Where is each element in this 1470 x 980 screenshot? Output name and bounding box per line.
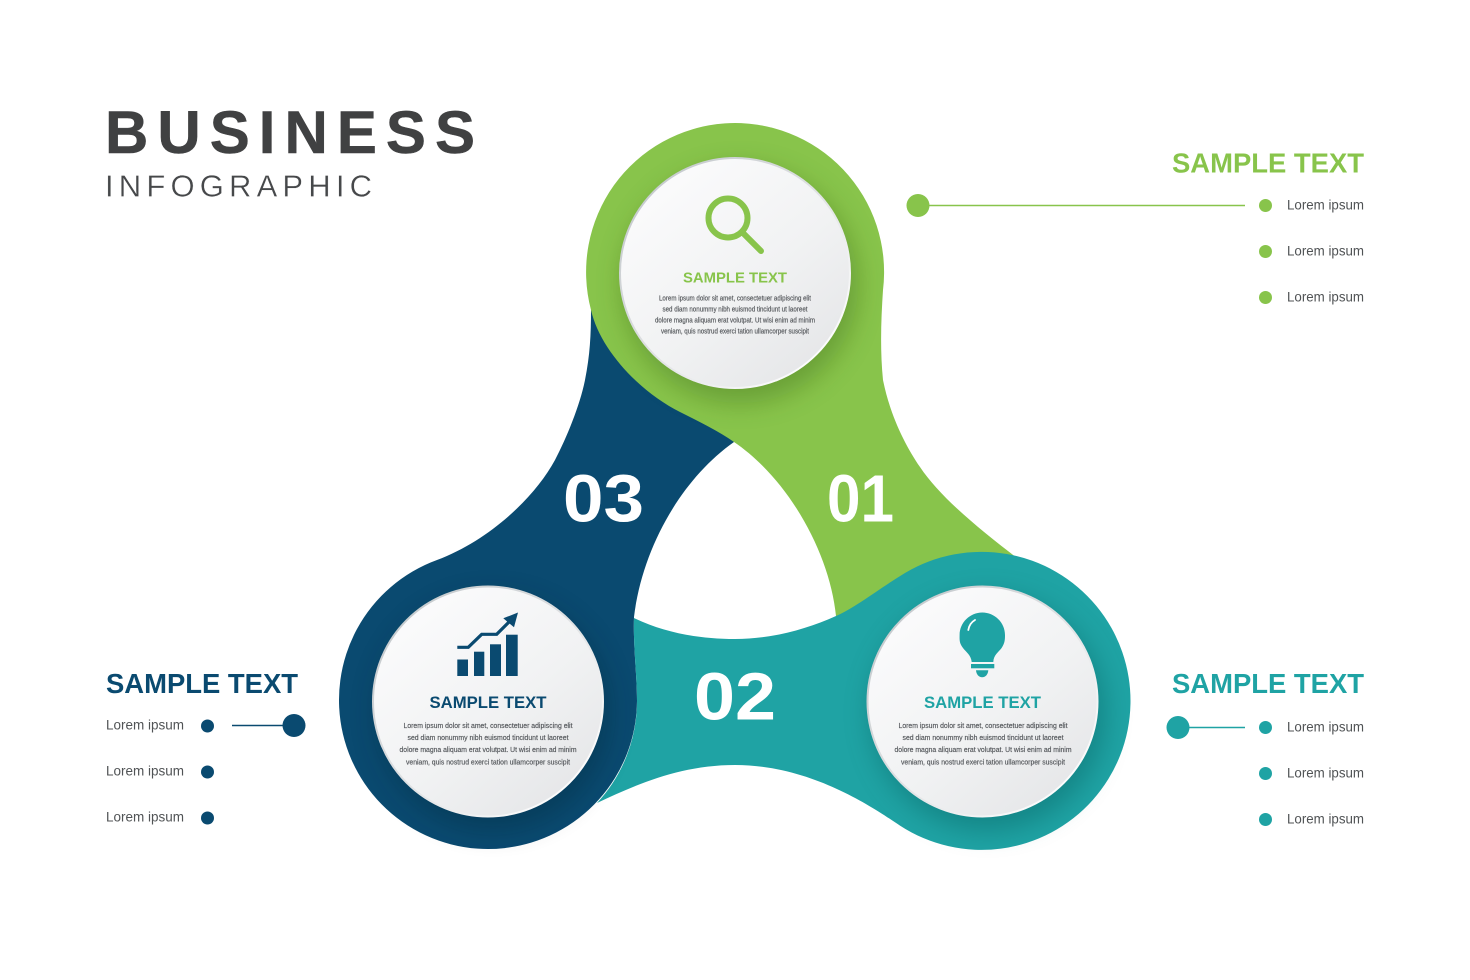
panel: left circle: veniam, quis nostrud exerci tation ullamcorper suscipit bbox=[406, 757, 571, 766]
title: INFOGRAPHIC bbox=[105, 168, 372, 204]
panel: top right legend: Lorem ipsum bbox=[1287, 242, 1364, 258]
panel: right circle: sed diam nonummy nibh euismod tincidunt ut laoreet bbox=[902, 733, 1064, 742]
segment 02 teal ring and arm bbox=[597, 552, 1130, 850]
title: BUSINESS bbox=[105, 99, 475, 166]
panel: top right legend: SAMPLE TEXT bbox=[1172, 148, 1364, 178]
panel: top right legend: Lorem ipsum bbox=[1287, 196, 1364, 212]
panel: top circle: Lorem ipsum dolor sit amet, consectetuer adipiscing elit bbox=[659, 294, 812, 302]
number 02: 02 bbox=[694, 660, 776, 734]
icon: magnifier bbox=[708, 198, 761, 251]
title bbox=[105, 99, 475, 204]
panel: top circle: SAMPLE TEXT bbox=[683, 270, 787, 286]
number 01: 01 bbox=[827, 462, 894, 536]
panel: bottom left legend: SAMPLE TEXT bbox=[106, 668, 298, 699]
segment 01 green ring and arm bbox=[586, 123, 1017, 620]
panel: right circle: veniam, quis nostrud exerci tation ullamcorper suscipit bbox=[901, 757, 1066, 766]
panel: bottom left legend: Lorem ipsum bbox=[106, 762, 184, 778]
panel: left circle: dolore magna aliquam erat volutpat. Ut wisi enim ad minim bbox=[400, 745, 576, 754]
panel: right circle: SAMPLE TEXT bbox=[924, 693, 1041, 712]
panel: top circle: veniam, quis nostrud exerci tation ullamcorper suscipit bbox=[661, 326, 810, 336]
panel: bottom right legend: Lorem ipsum bbox=[1287, 718, 1364, 734]
panel: bottom right legend bbox=[1166, 668, 1364, 826]
panel: right circle: Lorem ipsum dolor sit amet, consectetuer adipiscing elit bbox=[898, 721, 1068, 730]
panel: bottom left legend bbox=[106, 668, 306, 824]
panel: top circle: sed diam nonummy nibh euismod tincidunt ut laoreet bbox=[662, 304, 808, 314]
panel: left circle: sed diam nonummy nibh euismod tincidunt ut laoreet bbox=[408, 733, 569, 742]
panel: bottom right legend: Lorem ipsum bbox=[1287, 764, 1364, 780]
number 03: 03 bbox=[563, 462, 644, 536]
icon: light bulb bbox=[960, 612, 1005, 677]
panel: bottom right legend: SAMPLE TEXT bbox=[1172, 668, 1364, 699]
panel: bottom right legend: Lorem ipsum bbox=[1287, 810, 1364, 826]
panel: left circle: SAMPLE TEXT bbox=[430, 693, 546, 712]
panel: right circle bbox=[868, 586, 1106, 831]
panel: top circle: dolore magna aliquam erat volutpat. Ut wisi enim ad minim bbox=[655, 316, 815, 324]
panel: top right legend bbox=[906, 148, 1364, 304]
panel: left circle bbox=[373, 586, 611, 831]
panel: left circle: Lorem ipsum dolor sit amet, consectetuer adipiscing elit bbox=[404, 721, 573, 730]
panel: bottom left legend: Lorem ipsum bbox=[106, 808, 184, 824]
panel: top circle bbox=[620, 158, 858, 403]
panel: bottom left legend: Lorem ipsum bbox=[106, 716, 184, 732]
panel: top right legend: Lorem ipsum bbox=[1287, 288, 1364, 304]
icon: bar chart with arrow bbox=[457, 612, 518, 676]
segment 03 navy ring and arm bbox=[339, 310, 734, 849]
panel: right circle: dolore magna aliquam erat volutpat. Ut wisi enim ad minim bbox=[894, 745, 1072, 754]
